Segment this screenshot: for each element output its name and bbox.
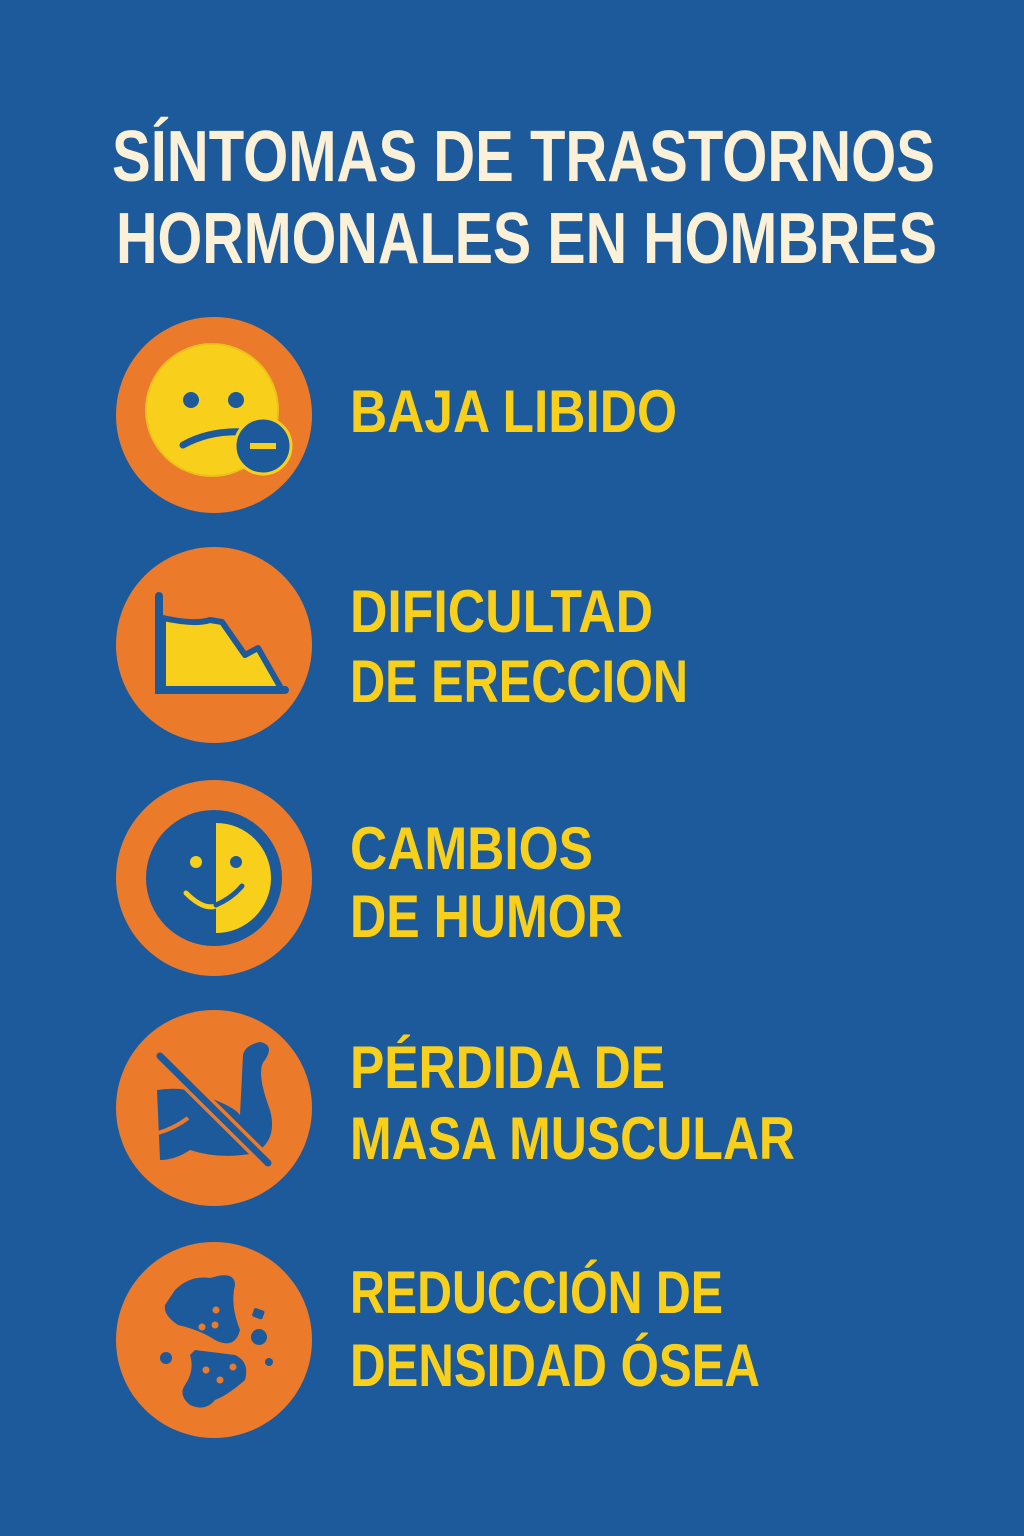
item: dificultad de ereccion	[116, 547, 688, 743]
item: reduccion de densidad osea	[116, 1242, 760, 1438]
label: cambios de humor: DE HUMOR	[350, 883, 623, 950]
label: dificultad de ereccion: DE ERECCION	[350, 648, 688, 715]
title	[112, 117, 937, 279]
label: baja libido: BAJA LIBIDO	[350, 378, 677, 445]
item: cambios de humor	[116, 780, 623, 976]
label: dificultad de ereccion: DIFICULTAD	[350, 578, 653, 645]
item: baja libido	[116, 317, 677, 513]
label: perdida de masa muscular: PÉRDIDA DE	[350, 1034, 665, 1101]
label: cambios de humor: CAMBIOS	[350, 815, 593, 882]
icon: sad face with minus	[116, 317, 312, 513]
item: perdida de masa muscular	[116, 1010, 795, 1206]
icon: declining chart	[116, 547, 312, 743]
label: reduccion de densidad osea: REDUCCIÓN DE	[350, 1259, 723, 1326]
icon: crossed-out muscle	[116, 1010, 312, 1206]
icon: half face	[116, 780, 312, 976]
label: perdida de masa muscular: MASA MUSCULAR	[350, 1105, 795, 1172]
icon: porous bone	[116, 1242, 312, 1438]
label: reduccion de densidad osea: DENSIDAD ÓSEA	[350, 1332, 760, 1399]
